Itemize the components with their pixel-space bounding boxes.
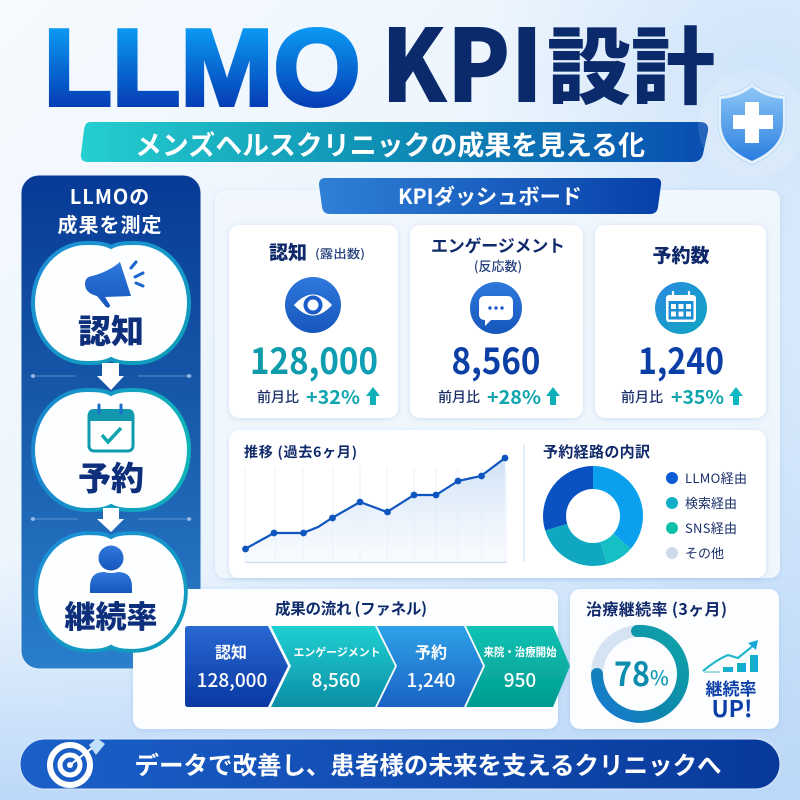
KPI card: 認知: 認知 [269,238,307,265]
step: 認知 [33,243,189,363]
step: 予約: 予約 [78,452,144,500]
legend: その他 [685,543,724,562]
legend [666,468,747,562]
panel heading: LLMOの [70,181,150,210]
KPI card: 認知: +32% [306,383,360,410]
funnel step: 予約: 予約 [415,639,447,663]
legend: LLMO経由 [685,468,747,487]
KPI card: 認知: (露出数) [315,245,365,262]
panel: treatment continuation rate: 継続率 [706,675,756,700]
funnel step: 来院・治療開始: 来院・治療開始 [484,644,557,660]
footer banner [20,738,780,789]
step: 継続率 [36,533,186,651]
KPI card: 予約数: 1,240 [638,333,724,385]
icon: target with arrow [50,738,105,785]
icon: chat [470,282,522,334]
KPI card: 予約数: 予約数 [652,241,710,268]
panel: treatment continuation rate: 治療継続率 (3ヶ月) [586,596,727,620]
icon: megaphone [85,262,143,308]
funnel step: 認知: 認知 [215,639,247,663]
panel: charts [229,430,766,578]
ring chart: % [650,662,669,691]
KPI card: 予約数 [595,225,766,418]
KPI card: エンゲージメント: 前月比 [438,387,480,407]
legend: 検索経由 [685,493,737,512]
icon: calendar [655,282,707,334]
icon: person [90,546,132,593]
KPI card: 予約数: 前月比 [621,387,663,407]
donut chart [555,478,631,554]
title: LLMO: LLMO [44,7,360,129]
line chart heading: 推移 (過去6ヶ月) [244,442,357,462]
dashboard heading tab [319,178,661,214]
panel: funnel [133,589,570,729]
funnel step: エンゲージメント [271,626,395,707]
ring chart [597,631,683,717]
KPI card: エンゲージメント: +28% [487,383,541,410]
icon: growth chart [703,640,758,672]
line chart [242,455,508,562]
title: 設計: 設計 [547,1,715,122]
panel: LLMO measurement flow: 成果を測定 [58,209,162,238]
KPI card: エンゲージメント: 8,560 [452,333,540,385]
KPI card: エンゲージメント: (反応数) [474,256,522,275]
funnel step: 予約 [377,626,483,707]
panel: LLMO measurement flow [21,175,201,669]
arrow [97,363,124,390]
legend: SNS経由 [685,518,737,537]
step: 継続率: 継続率 [64,592,158,637]
KPI card: 認知 [229,225,398,418]
panel: KPI dashboard [215,178,780,578]
funnel step: 来院・治療開始 [466,626,570,707]
icon: shield with cross [698,70,800,178]
funnel step: 来院・治療開始: 950 [504,666,536,693]
dashboard heading tab: KPIダッシュボード [398,181,582,211]
panel: treatment continuation rate: UP! [711,690,753,724]
ring chart: 78 [614,648,650,696]
KPI card: 認知: 128,000 [250,333,378,385]
funnel heading: 成果の流れ (ファネル) [275,597,427,619]
funnel step: 認知: 128,000 [197,666,267,693]
KPI card: 認知: 前月比 [257,387,299,407]
step: 認知: 認知 [78,305,144,353]
donut heading: 予約経路の内訳 [543,441,650,462]
title [44,0,715,132]
KPI card: エンゲージメント [410,225,583,418]
funnel step: エンゲージメント: 8,560 [312,666,360,693]
subtitle banner: メンズヘルスクリニックの成果を見える化 [135,124,645,163]
funnel step: 認知 [185,626,288,707]
KPI card: エンゲージメント: エンゲージメント [431,232,565,257]
footer banner: データで改善し、患者様の未来を支えるクリニックへ [134,747,722,782]
icon: eye [285,277,341,333]
icon: calendar check [88,405,134,451]
arrow [97,508,124,532]
step: 予約 [33,390,189,510]
funnel step: エンゲージメント: エンゲージメント [294,644,380,660]
funnel step: 予約: 1,240 [407,666,455,693]
KPI card: 予約数: +35% [671,383,724,410]
panel: treatment continuation rate [570,589,779,729]
